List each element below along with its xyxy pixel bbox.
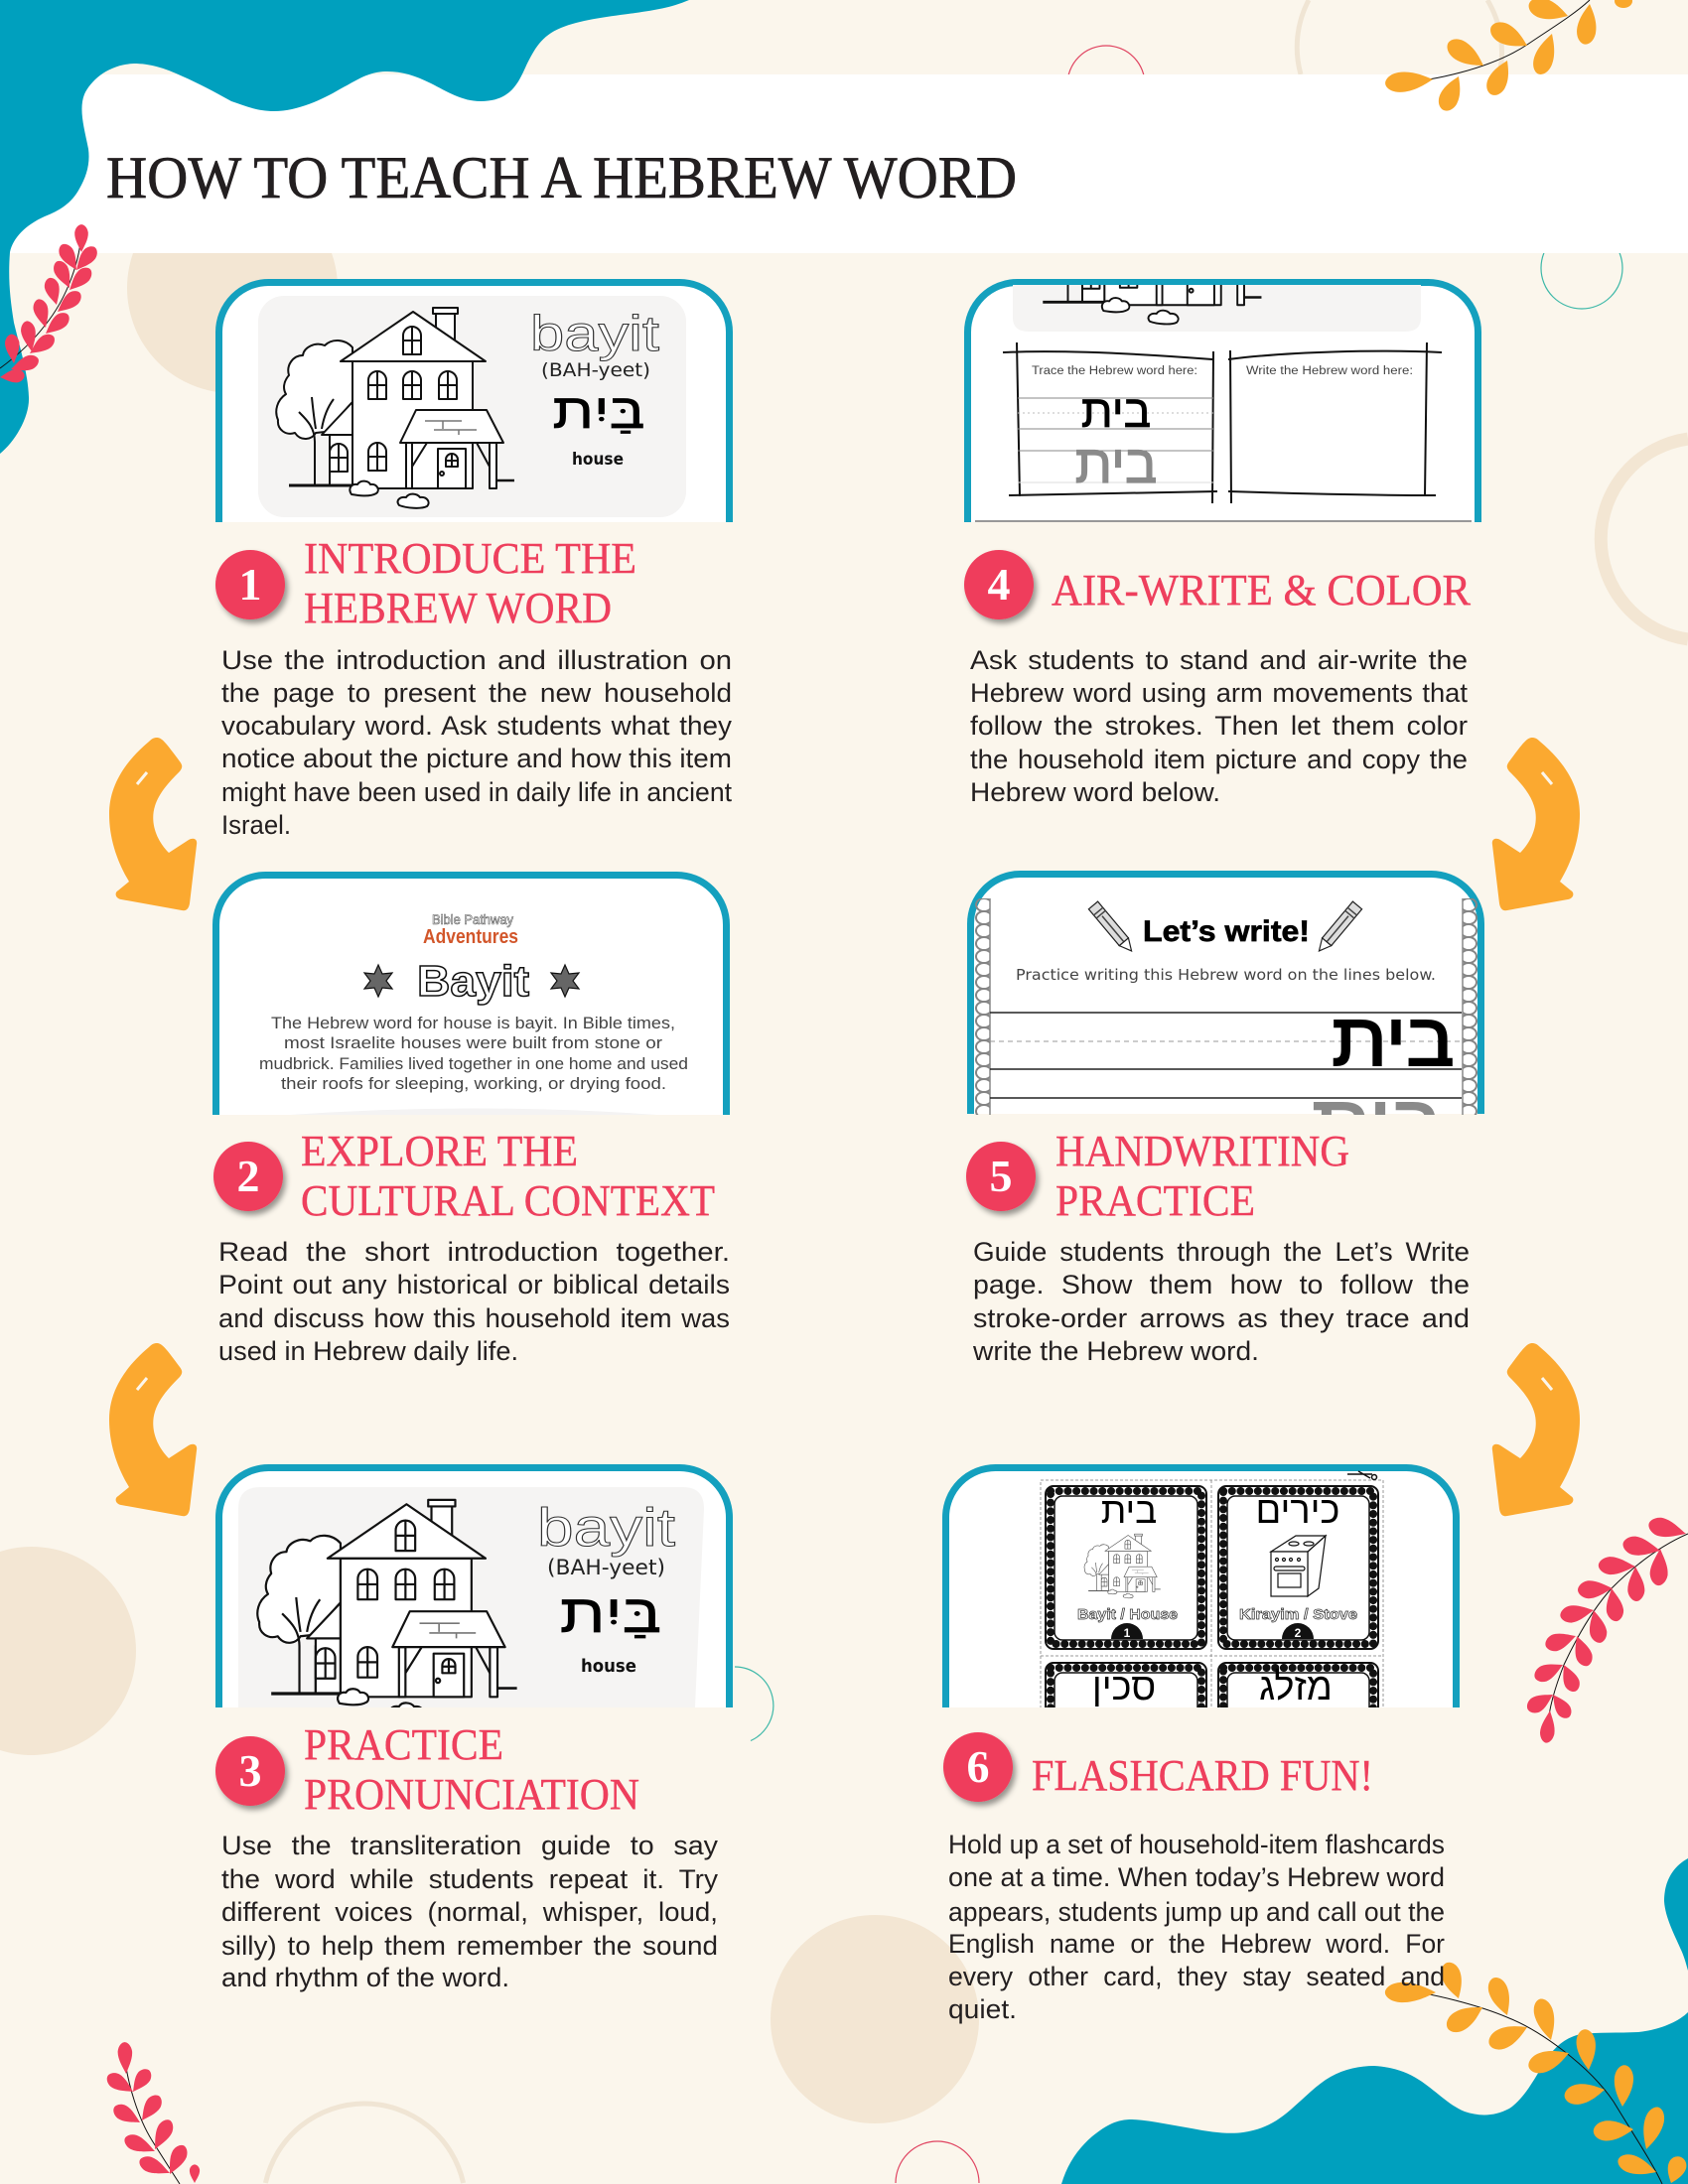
heading 4: AIR-WRITE & COLOR <box>1052 566 1472 614</box>
arrow: right 2 <box>1492 1343 1580 1516</box>
body text 1: Use the introduction and illustration on <box>221 645 732 675</box>
body text 2: Point out any historical or biblical details <box>218 1270 730 1299</box>
Hebrew grey word: בית <box>1075 435 1157 494</box>
body text 3: and rhythm of the word. <box>221 1963 509 1992</box>
star left <box>364 965 392 997</box>
body text 6: one at a time. When today’s Hebrew word <box>948 1862 1445 1892</box>
word: bayit outline: bayit <box>537 1498 675 1558</box>
arrow: left 2 <box>109 1343 197 1516</box>
flashcard: kirayim: כירים <box>1255 1490 1340 1532</box>
branch: red right <box>1524 1515 1688 1743</box>
pronunciation: (BAH-yeet) <box>541 359 650 381</box>
dashed cut lines <box>1041 1479 1384 1707</box>
panel: step 6 flashcards <box>943 1467 1456 2024</box>
heading 5 <box>1055 1127 1349 1225</box>
number badge 4: 4 <box>987 559 1011 610</box>
card: trace worksheet <box>964 279 1481 522</box>
body text 5 <box>972 1237 1470 1366</box>
teal blob bottom right <box>1061 2012 1688 2184</box>
number badge 3: 3 <box>238 1745 262 1796</box>
body text 6: English name or the Hebrew word. For <box>948 1929 1445 1959</box>
body text 1: might have been used in daily life in ancient <box>221 777 732 807</box>
pencil right <box>1315 901 1362 955</box>
body text 2: and discuss how this household item was <box>218 1303 730 1333</box>
flashcard: bayit: Bayit / House <box>1077 1606 1178 1623</box>
panel: step 3 pronunciation <box>215 1467 729 1992</box>
intro text: mudbrick. Families lived together in one home and used <box>259 1054 688 1073</box>
heading 2: EXPLORE THE <box>301 1127 578 1175</box>
heading let's write: Let’s write! <box>1143 915 1310 948</box>
heading 1: HEBREW WORD <box>304 584 612 632</box>
writing lines <box>990 1013 1462 1098</box>
body text 6: Hold up a set of household-item flashcards <box>948 1830 1445 1859</box>
body text 4: Ask students to stand and air-write the <box>970 645 1468 675</box>
body text 6: appears, students jump up and call out the <box>948 1897 1445 1927</box>
card: house picture large <box>218 1467 729 1718</box>
body text 6: quiet. <box>948 1994 1017 2024</box>
worksheet labels: Write the Hebrew word here: <box>1246 365 1413 377</box>
big beige ring right <box>1601 439 1688 639</box>
illustration: house <box>276 308 514 508</box>
body text 2 <box>218 1237 730 1366</box>
Hebrew word: בַּיִת <box>553 383 644 439</box>
red thin ring top <box>1067 46 1145 123</box>
intro text: The Hebrew word for house is bayit. In Bible times, <box>271 1014 675 1032</box>
body text 1: notice about the picture and how this item <box>221 744 732 773</box>
heading 2 <box>301 1127 715 1225</box>
flashcard: sakin <box>1045 1662 1207 1707</box>
heading 1 <box>304 534 636 632</box>
card: flashcard sheet <box>942 1464 1460 1707</box>
number badge 5 <box>966 1142 1036 1211</box>
trace frame <box>1003 342 1442 503</box>
body text 5: write the Hebrew word. <box>972 1336 1259 1366</box>
intro text: their roofs for sleeping, working, or drying food. <box>281 1074 666 1093</box>
card: intro page <box>216 876 727 1115</box>
body text 3: Use the transliteration guide to say <box>221 1831 719 1860</box>
Hebrew word grey clipped: בית <box>1312 1081 1443 1164</box>
panel: step 5 handwriting <box>966 874 1481 1366</box>
body text 1: vocabulary word. Ask students what they <box>221 711 733 741</box>
logo <box>423 911 518 948</box>
branch: red bottom left <box>103 2042 200 2184</box>
body text 2: used in Hebrew daily life. <box>218 1336 518 1366</box>
English word: house <box>572 450 624 470</box>
writing lines <box>1018 398 1213 482</box>
worksheet labels: Trace the Hebrew word here: <box>1032 365 1197 377</box>
heading 1: INTRODUCE THE <box>304 534 636 583</box>
body text 1 <box>221 645 733 840</box>
scallop borders <box>975 898 1477 1115</box>
pencil left <box>1088 901 1136 955</box>
number badge 5: 5 <box>989 1151 1013 1201</box>
body text 5: page. Show them how to follow the <box>973 1270 1470 1299</box>
page title Bayit: Bayit <box>417 957 529 1006</box>
illustration: house bottom <box>1043 285 1261 326</box>
flashcard: kirayim: 2 <box>1295 1626 1302 1640</box>
body text 3: silly) to help them remember the sound <box>221 1931 718 1961</box>
beige ring top right <box>1297 0 1502 74</box>
word: bayit outline: bayit <box>530 306 659 361</box>
body text 4: Hebrew word below. <box>970 777 1220 807</box>
Hebrew word black: בית <box>1332 1000 1455 1081</box>
teal thin ring right <box>1541 227 1622 309</box>
logo: Adventures <box>423 926 518 948</box>
flashcard: sakin: סכין <box>1092 1667 1156 1708</box>
logo: Bible Pathway <box>432 911 513 927</box>
worksheet labels <box>1032 365 1413 377</box>
flashcard: bayit <box>1046 1486 1206 1649</box>
panel: step 2 cultural context <box>213 876 730 1366</box>
beige circle bottom centre <box>771 1915 979 2123</box>
scissors <box>1347 1471 1376 1479</box>
flashcard: kirayim <box>1218 1486 1378 1649</box>
beige circle top left <box>127 183 338 393</box>
heading 5: PRACTICE <box>1055 1176 1255 1225</box>
heading 3 <box>304 1720 639 1819</box>
number badge 2: 2 <box>236 1151 260 1201</box>
body text 5: Guide students through the Let’s Write <box>973 1237 1470 1267</box>
intro text: most Israelite houses were built from stone or <box>284 1033 662 1052</box>
beige circle left <box>0 1547 136 1755</box>
heading 3: PRONUNCIATION <box>304 1770 639 1819</box>
arrow: left 1 <box>109 738 197 910</box>
branch: red top left <box>0 224 100 384</box>
flashcard: kirayim: Kirayim / Stove <box>1239 1606 1357 1623</box>
number badge 1: 1 <box>238 559 262 610</box>
teal blob top left <box>0 0 689 454</box>
number badge 6: 6 <box>967 1741 989 1792</box>
card: house picture <box>218 282 729 522</box>
number badge 1 <box>215 550 285 619</box>
title: HOW TO TEACH A HEBREW WORD <box>106 145 1017 210</box>
heading 5: HANDWRITING <box>1055 1127 1349 1175</box>
number badge 2 <box>213 1142 283 1211</box>
heading 6: FLASHCARD FUN! <box>1032 1751 1373 1800</box>
body text 4: Hebrew word using arm movements that <box>970 678 1468 708</box>
body text 4: follow the strokes. Then let them color <box>970 711 1468 741</box>
teal thin arc by card 3 <box>735 1667 774 1741</box>
body text 3: the word while students repeat it. Try <box>221 1864 719 1894</box>
teal blob right edge <box>1664 1858 1688 1971</box>
body text 6 <box>948 1830 1445 2024</box>
arrow: right 1 <box>1492 738 1580 910</box>
heading 2: CULTURAL CONTEXT <box>301 1176 715 1225</box>
number badge 4 <box>964 550 1034 619</box>
flashcard: bayit: בית <box>1101 1490 1157 1531</box>
body text 2: Read the short introduction together. <box>218 1237 730 1267</box>
stove icon <box>1271 1536 1326 1596</box>
body text 3: different voices (normal, whisper, loud, <box>221 1897 718 1927</box>
English word: house <box>581 1656 636 1677</box>
body text 5: stroke-order arrows as they trace and <box>973 1303 1470 1333</box>
number badge 6 <box>943 1732 1013 1802</box>
flashcard: mazleg <box>1217 1662 1379 1707</box>
body text 1: the page to present the new household <box>221 678 732 708</box>
star right <box>551 965 579 997</box>
number badge 3 <box>215 1736 285 1806</box>
card: let's write page <box>967 871 1484 1115</box>
pronunciation: (BAH-yeet) <box>547 1556 665 1579</box>
instruction: Practice writing this Hebrew word on the lines below. <box>1016 966 1436 984</box>
flashcard: bayit: 1 <box>1124 1626 1131 1640</box>
branch: orange top right <box>1384 0 1632 114</box>
beige ring bottom left <box>265 2104 464 2183</box>
heading 3: PRACTICE <box>304 1720 503 1769</box>
body text 4: the household item picture and copy the <box>970 745 1468 774</box>
branch: orange bottom right <box>1385 1960 1688 2184</box>
illustration: house <box>257 1500 517 1718</box>
body text 3 <box>221 1831 719 1992</box>
Hebrew trace word: בית <box>1081 385 1151 437</box>
flashcard: mazleg: מזלג <box>1259 1667 1333 1708</box>
title band <box>0 74 1688 253</box>
body text 4 <box>970 645 1468 807</box>
body text 1: Israel. <box>221 810 291 840</box>
red thin ring bottom <box>896 2141 979 2183</box>
panel: step 1 introduce <box>215 282 733 840</box>
body text 6: every other card, they stay seated and <box>948 1962 1445 1991</box>
intro text <box>259 1014 688 1093</box>
Hebrew word: בַּיִת <box>560 1583 661 1644</box>
panel: step 4 air-write <box>963 279 1481 802</box>
